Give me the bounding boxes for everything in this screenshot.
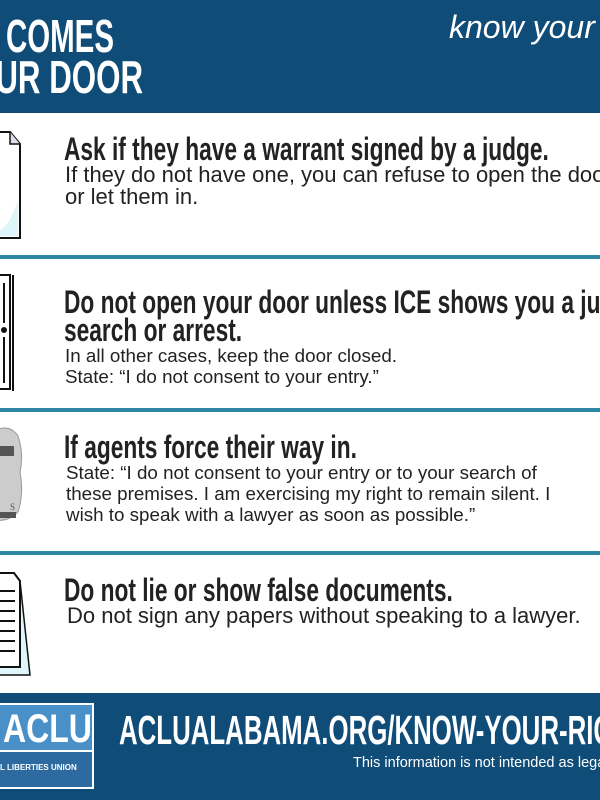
body text bbox=[65, 162, 600, 209]
heading: Ask if they have a warrant signed by a judge. bbox=[64, 131, 549, 167]
body text: If they do not have one, you can refuse to open the door bbox=[65, 162, 600, 187]
logo: ACLU bbox=[0, 703, 94, 789]
body text: or let them in. bbox=[65, 184, 198, 209]
title: COMES bbox=[6, 10, 114, 62]
icon: badge: S bbox=[10, 502, 15, 512]
body text: these premises. I am exercising my right to remain silent. I bbox=[66, 483, 550, 504]
heading: search or arrest. bbox=[64, 312, 242, 348]
header bar bbox=[0, 0, 600, 113]
icon: documents bbox=[0, 572, 31, 676]
logo: ACLU: L LIBERTIES UNION bbox=[0, 763, 77, 772]
body text: Do not sign any papers without speaking to a lawyer. bbox=[67, 603, 581, 628]
body text: In all other cases, keep the door closed. bbox=[65, 345, 397, 366]
body text bbox=[66, 462, 550, 525]
heading: Do not lie or show false documents. bbox=[64, 572, 453, 608]
heading bbox=[64, 284, 600, 348]
body text: wish to speak with a lawyer as soon as possible.” bbox=[66, 504, 475, 525]
panel: door bbox=[0, 274, 600, 391]
body text bbox=[65, 345, 397, 387]
footer bbox=[0, 693, 600, 800]
panel: agents force bbox=[0, 428, 550, 525]
title bbox=[0, 10, 143, 103]
heading: If agents force their way in. bbox=[64, 429, 357, 465]
panel: warrant bbox=[0, 131, 600, 239]
icon: badge bbox=[0, 428, 22, 521]
body text: State: “I do not consent to your entry.” bbox=[65, 366, 379, 387]
icon: door bbox=[0, 274, 14, 391]
panel: false documents bbox=[0, 572, 581, 676]
icon: paper bbox=[0, 131, 21, 239]
body text: State: “I do not consent to your entry or to your search of bbox=[66, 462, 537, 483]
logo: ACLU: ACLU bbox=[3, 707, 92, 751]
